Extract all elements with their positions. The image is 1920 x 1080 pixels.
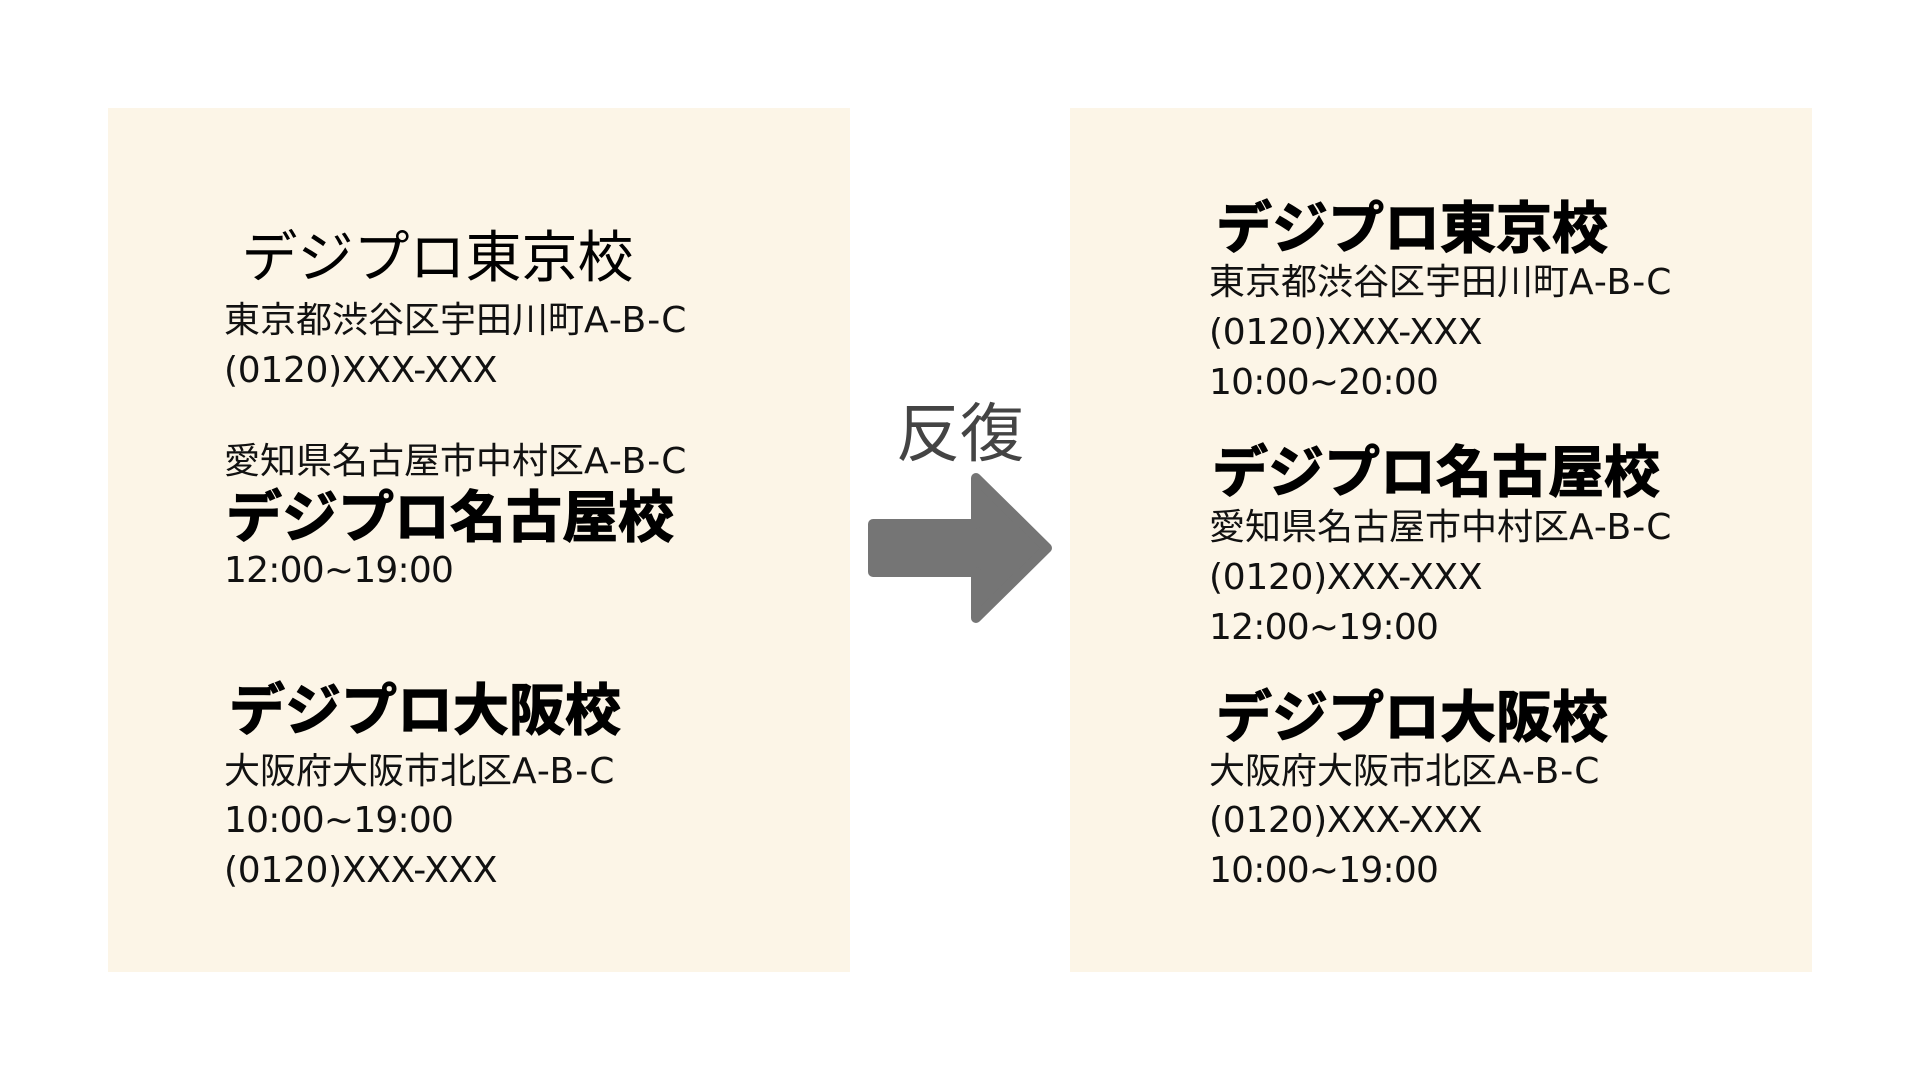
label: repetition: 反復 <box>896 383 1024 475</box>
school block: Tokyo (incomplete): (0120)XXX-XXX <box>224 350 497 391</box>
school block: Tokyo (incomplete): デジプロ東京校 <box>242 213 634 294</box>
school block: Osaka: (0120)XXX-XXX <box>1209 800 1482 841</box>
school block: Nagoya <box>1209 428 1672 648</box>
school block: Osaka: 10:00~19:00 <box>224 800 453 841</box>
arrow <box>873 478 1047 618</box>
school block: Tokyo: 10:00~20:00 <box>1209 362 1438 403</box>
school block: Nagoya: 12:00~19:00 <box>1209 607 1438 648</box>
school block: Nagoya: (0120)XXX-XXX <box>1209 557 1482 598</box>
school block: Nagoya (scrambled order): 12:00~19:00 <box>224 550 453 591</box>
school block: Osaka: 大阪府大阪市北区A-B-C <box>224 751 615 792</box>
school block: Osaka: デジプロ大阪校 <box>1216 673 1608 754</box>
school block: Tokyo: 東京都渋谷区宇田川町A-B-C <box>1209 262 1672 303</box>
school block: Nagoya (scrambled order) <box>224 441 687 591</box>
school block: Osaka: 大阪府大阪市北区A-B-C <box>1209 751 1600 792</box>
school block: Nagoya: 愛知県名古屋市中村区A-B-C <box>1209 507 1672 548</box>
school block: Osaka <box>224 666 621 891</box>
school block: Tokyo (incomplete): 東京都渋谷区宇田川町A-B-C <box>224 300 687 341</box>
school block: Osaka: (0120)XXX-XXX <box>224 850 497 891</box>
school block: Osaka <box>1209 673 1608 891</box>
school block: Nagoya: デジプロ名古屋校 <box>1212 428 1660 509</box>
school block: Tokyo: (0120)XXX-XXX <box>1209 312 1482 353</box>
school block: Tokyo (incomplete) <box>224 213 687 391</box>
panel: before (left) <box>108 108 850 972</box>
school block: Tokyo: デジプロ東京校 <box>1216 184 1608 265</box>
school block: Nagoya (scrambled order): デジプロ名古屋校 <box>226 473 674 554</box>
school block: Osaka: 10:00~19:00 <box>1209 850 1438 891</box>
school block: Nagoya (scrambled order): 愛知県名古屋市中村区A-B-C <box>224 441 687 482</box>
panel: after (right) <box>1070 108 1812 972</box>
school block: Osaka: デジプロ大阪校 <box>229 666 621 747</box>
school block: Tokyo <box>1209 184 1672 403</box>
